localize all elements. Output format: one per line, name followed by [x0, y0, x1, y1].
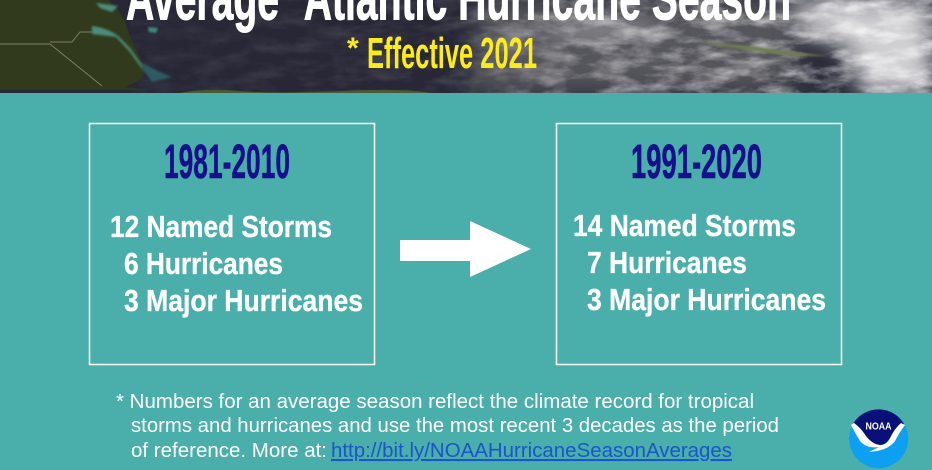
major hurricanes 3: 3 Major Hurricanes [587, 283, 826, 317]
hurricanes 7: 7 Hurricanes [587, 246, 747, 280]
subtitle: effective 2021: Effective 2021 [367, 29, 537, 78]
icon: NOAA logo [849, 409, 908, 468]
major hurricanes 3: 3 Major Hurricanes [124, 284, 363, 318]
footnote: of reference. More at: [131, 439, 327, 462]
Cuba coastline [180, 90, 430, 93]
hurricanes 6: 6 Hurricanes [124, 247, 283, 281]
named storms 14: 14 Named Storms [573, 209, 796, 243]
footnote [116, 390, 779, 462]
period heading 1991-2020: 1991-2020 [631, 136, 762, 189]
panel: 1981-2010 averages [90, 124, 374, 364]
period heading 1981-2010: 1981-2010 [164, 136, 290, 189]
shallow reef water [92, 26, 146, 72]
land: Florida and Georgia [0, 0, 150, 90]
named storms 12: 12 Named Storms [110, 210, 332, 244]
subtitle: effective 2021 [347, 29, 537, 78]
logo wordmark: NOAA [866, 420, 892, 432]
footnote: * Numbers for an average season reflect the climate record for tropical [116, 390, 754, 413]
satellite image banner [0, 0, 932, 94]
footnote: storms and hurricanes and use the most recent 3 decades as the period [131, 414, 779, 437]
state borders [0, 32, 102, 86]
subtitle: effective 2021: * [347, 32, 359, 65]
panel: 1991-2020 averages [556, 124, 842, 364]
link: http://bit.ly/NOAAHurricaneSeasonAverages [331, 439, 732, 462]
cloud cover [130, 0, 932, 94]
arrow [400, 221, 531, 277]
